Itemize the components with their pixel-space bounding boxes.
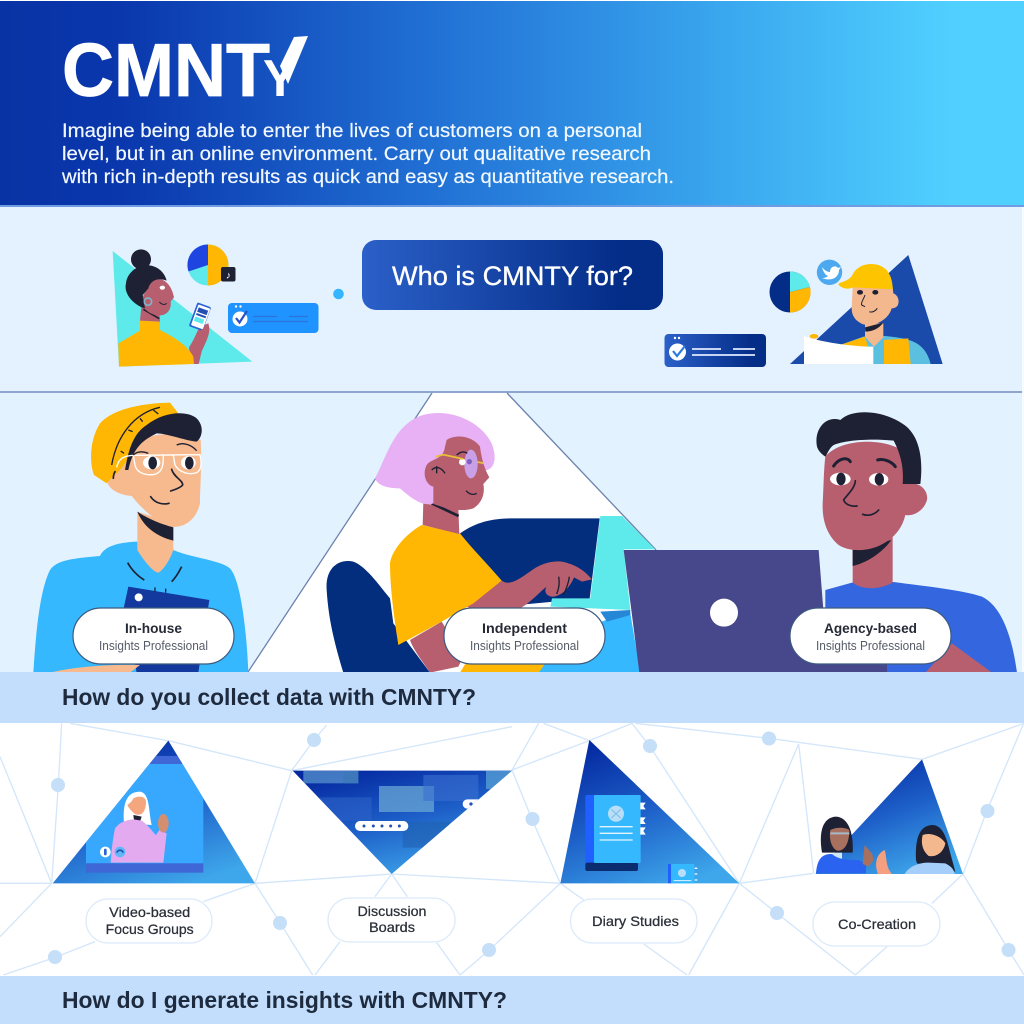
network nodes <box>48 732 1016 964</box>
label: co-creation <box>813 902 940 946</box>
illustration: video focus group triangle <box>53 741 255 883</box>
label: discussion boards: Boards <box>369 919 415 935</box>
illustration: agency-based professional <box>624 412 1017 673</box>
pie chart: left <box>187 244 228 286</box>
logo: CMNTY: Y <box>263 50 297 108</box>
label: in-house: Insights Professional <box>99 639 208 653</box>
pie chart: right <box>770 271 811 313</box>
label: diary studies: Diary Studies <box>592 913 679 929</box>
icon: TikTok <box>221 267 236 282</box>
card: check list right <box>664 334 766 367</box>
heading bar: how do I generate insights <box>0 976 1024 1024</box>
label: independent: Insights Professional <box>470 639 579 653</box>
label: video-based focus groups: Video-based <box>109 904 190 920</box>
logo: CMNTY: CMNT <box>62 28 270 112</box>
panel: data collection methods <box>0 723 1024 976</box>
label: agency-based: Insights Professional <box>816 639 925 653</box>
label: co-creation: Co-Creation <box>838 916 916 932</box>
illustration: discussion board triangle <box>293 771 512 874</box>
label: video-based focus groups: Focus Groups <box>106 921 194 937</box>
icon: Twitter <box>817 260 842 285</box>
heading bar: how do you collect data: How do you collect data with CMNTY? <box>62 684 476 710</box>
label: in-house: In-house <box>125 620 182 636</box>
icon: TikTok: ♪ <box>226 270 231 282</box>
illustration: diary studies triangle <box>560 740 739 884</box>
card: check list left <box>228 303 318 333</box>
intro text: Imagine being able to enter the lives of customers on a personal <box>62 120 642 142</box>
label: agency-based <box>790 608 951 664</box>
label: independent <box>444 608 605 664</box>
illustration: construction worker <box>790 255 943 364</box>
header banner <box>0 1 1024 207</box>
label: discussion boards <box>328 898 455 942</box>
label: video-based focus groups <box>86 899 212 943</box>
illustration: woman with phone <box>113 249 252 367</box>
intro text: with rich in-depth results as quick and easy as quantitative research. <box>61 166 674 188</box>
heading bar: how do I generate insights: How do I generate insights with CMNTY? <box>62 987 507 1013</box>
illustration: independent professional <box>327 413 655 673</box>
illustration: in-house professional <box>33 403 248 673</box>
label: discussion boards: Discussion <box>358 903 426 919</box>
panel: who is CMNTY for <box>0 207 1024 393</box>
heading pill: who is CMNTY for <box>362 240 663 310</box>
connector dot <box>333 289 344 299</box>
heading pill: who is CMNTY for: Who is CMNTY for? <box>392 261 633 291</box>
label: agency-based: Agency-based <box>824 620 917 636</box>
heading bar: how do you collect data <box>0 672 1024 723</box>
label: in-house <box>73 608 234 664</box>
intro text <box>61 120 674 188</box>
label: independent: Independent <box>482 620 567 636</box>
panel: personas <box>0 207 1024 673</box>
illustration: co-creation triangle <box>815 759 963 874</box>
label: diary studies <box>570 899 697 943</box>
intro text: level, but in an online environment. Carry out qualitative research <box>62 143 651 165</box>
